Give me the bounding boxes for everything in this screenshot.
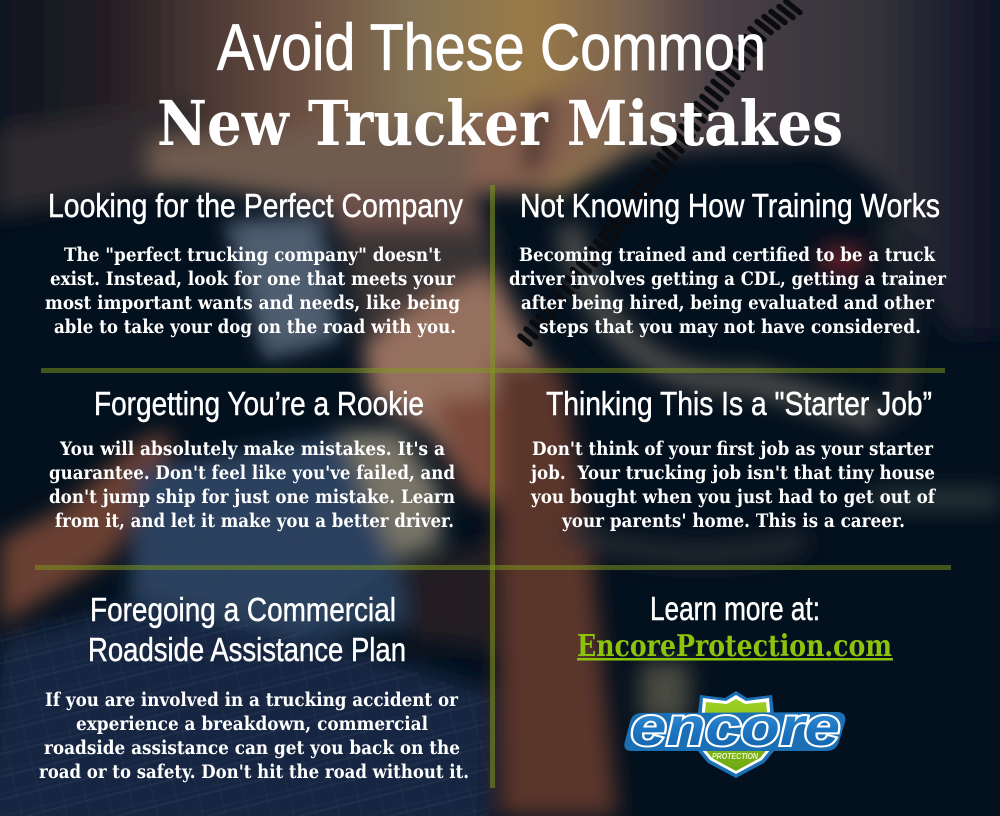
panel: foregoing a commercial roadside assistance plan: roadside assistance can get you back on the xyxy=(44,737,460,759)
panel: foregoing a commercial roadside assistance plan: road or to safety. Don't hit the road without it. xyxy=(39,761,469,783)
panel: thinking this is a starter job xyxy=(529,385,937,532)
panel: looking for the perfect company: The "perfect trucking company" doesn't xyxy=(64,244,441,266)
panel: foregoing a commercial roadside assistance plan: experience a breakdown, commercial xyxy=(76,713,428,735)
panel: forgetting you're a rookie: from it, and let it make you a better driver. xyxy=(55,510,454,532)
panel: looking for the perfect company xyxy=(45,187,463,338)
plaid shirt weave xyxy=(130,218,395,640)
panel: foregoing a commercial roadside assistance plan xyxy=(39,591,469,783)
call to action xyxy=(577,590,893,664)
title xyxy=(157,10,843,160)
panel: thinking this is a starter job: job. Your trucking job isn't that tiny house xyxy=(529,462,935,484)
call to action: Learn more at: xyxy=(650,590,820,627)
panel: thinking this is a starter job: you bought when you just had to get out of xyxy=(530,486,937,508)
title: New Trucker Mistakes xyxy=(157,87,843,160)
panel: thinking this is a starter job: your parents' home. This is a career. xyxy=(561,510,905,532)
panel: forgetting you're a rookie: don't jump ship for just one mistake. Learn xyxy=(49,486,455,508)
logo: encore protection xyxy=(624,691,845,778)
panel: not knowing how training works: Not Knowing How Training Works xyxy=(520,187,940,224)
icon: shield xyxy=(697,691,775,778)
panel: thinking this is a starter job: Thinking This Is a "Starter Job” xyxy=(546,385,932,422)
panel: looking for the perfect company: able to take your dog on the road with you. xyxy=(54,316,456,338)
panel: not knowing how training works: driver involves getting a CDL, getting a trainer xyxy=(509,268,947,290)
panel: forgetting you're a rookie: You will absolutely make mistakes. It's a xyxy=(59,438,445,460)
panel: looking for the perfect company: Looking for the Perfect Company xyxy=(48,187,463,224)
panel: thinking this is a starter job: Don't think of your first job as your starter xyxy=(532,438,934,460)
panel: not knowing how training works: Becoming trained and certified to be a truck xyxy=(519,244,936,266)
grid divider lines xyxy=(35,185,951,788)
wordmark: encore xyxy=(631,697,840,757)
coiled cord xyxy=(520,2,800,344)
panel: not knowing how training works: after being hired, being evaluated and other xyxy=(521,292,935,314)
panel: not knowing how training works: steps that you may not have considered. xyxy=(539,316,921,338)
call to action: EncoreProtection.com xyxy=(577,629,892,664)
panel: forgetting you're a rookie xyxy=(49,385,455,532)
tagline: PROTECTION xyxy=(712,752,758,761)
panel: looking for the perfect company: most important wants and needs, like being xyxy=(45,292,460,314)
panel: foregoing a commercial roadside assistance plan: Foregoing a Commercial xyxy=(90,591,396,628)
panel: forgetting you're a rookie: Forgetting You’re a Rookie xyxy=(94,385,424,422)
panel: forgetting you're a rookie: guarantee. Don't feel like you've failed, and xyxy=(49,462,455,484)
panel: foregoing a commercial roadside assistance plan: Roadside Assistance Plan xyxy=(88,631,406,668)
panel: foregoing a commercial roadside assistance plan: If you are involved in a trucking accident or xyxy=(45,689,459,711)
panel: looking for the perfect company: exist. Instead, look for one that meets your xyxy=(50,268,456,290)
title: Avoid These Common xyxy=(217,10,766,84)
panel: not knowing how training works xyxy=(509,187,947,338)
wordmark band xyxy=(624,712,845,751)
